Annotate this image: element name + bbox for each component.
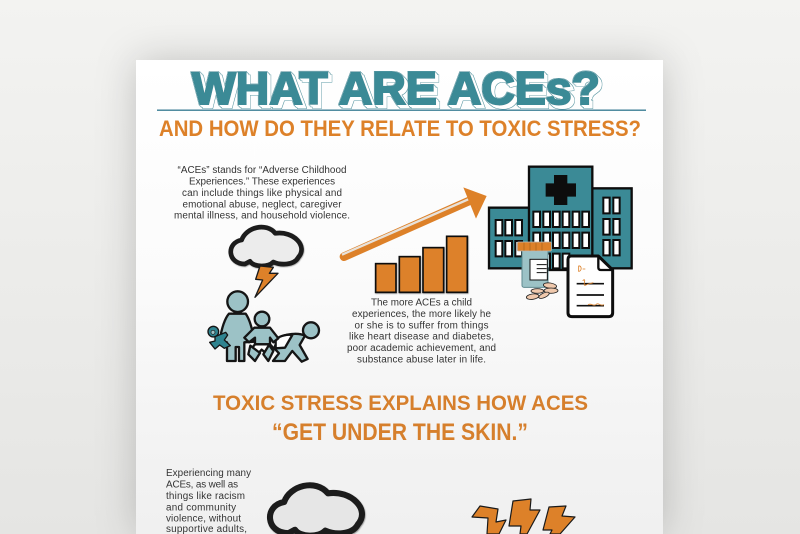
text block: effects of ACEs: The more ACEs a child xyxy=(371,298,472,308)
icon: crawling baby xyxy=(273,322,319,362)
text block: effects of ACEs: substance abuse later in life. xyxy=(357,354,486,365)
icon: cloud xyxy=(231,227,302,266)
text block: what ACEs stands for xyxy=(174,165,350,222)
heading: toxic stress: “GET UNDER THE SKIN.” xyxy=(272,419,528,446)
bar chart xyxy=(376,236,467,292)
icon: hospital windows xyxy=(496,198,620,268)
title rule xyxy=(157,110,646,111)
icon: teddy bear xyxy=(208,326,230,349)
icon: older child xyxy=(220,291,254,361)
icon: toddler in diaper xyxy=(244,312,278,361)
text block: experiencing many ACEs: Experiencing many xyxy=(166,468,251,479)
icon: pills xyxy=(526,282,558,300)
text block: effects of ACEs xyxy=(347,298,496,365)
icon: left bolt xyxy=(472,506,506,534)
icon: prescription paper xyxy=(568,256,613,317)
text block: what ACEs stands for: mental illness, and household violence. xyxy=(174,211,350,222)
icon: lightning bolt xyxy=(255,266,278,297)
text block: effects of ACEs: or she is to suffer from things xyxy=(354,320,489,331)
heading: toxic stress: TOXIC STRESS EXPLAINS HOW ACES xyxy=(213,392,588,415)
text block: experiencing many ACEs: things like racism xyxy=(166,491,245,502)
text block: what ACEs stands for: can include things like physical and xyxy=(182,188,342,199)
icon: large cloud xyxy=(270,485,362,534)
text block: what ACEs stands for: Experiences.” These experiences xyxy=(189,176,335,188)
icon: medicine bottle xyxy=(517,242,551,287)
paper sheet xyxy=(136,60,663,534)
text block: experiencing many ACEs xyxy=(166,468,251,534)
text block: effects of ACEs: experiences, the more likely he xyxy=(352,309,492,320)
text block: what ACEs stands for: “ACEs” stands for “Adverse Childhood xyxy=(178,165,346,176)
icon: medical cross xyxy=(546,175,576,205)
icon: right bolt xyxy=(543,506,575,534)
icon: three lightning bolts xyxy=(472,499,575,534)
text block: experiencing many ACEs: ACEs, as well as xyxy=(166,480,238,490)
heading: toxic stress xyxy=(213,392,588,446)
icon: middle bolt xyxy=(509,499,540,534)
icon: rising arrow xyxy=(342,187,487,257)
icon: children group xyxy=(208,291,319,362)
text block: effects of ACEs: poor academic achievement, and xyxy=(347,343,496,354)
icon: storm cloud with lightning xyxy=(231,227,302,297)
text block: effects of ACEs: like heart disease and diabetes, xyxy=(349,332,494,343)
text block: what ACEs stands for: emotional abuse, neglect, caregiver xyxy=(182,199,342,210)
text block: experiencing many ACEs: and community xyxy=(166,502,236,513)
subtitle: AND HOW DO THEY RELATE TO TOXIC STRESS? xyxy=(159,116,641,141)
icon: hospital, medicine and prescription xyxy=(489,167,632,317)
title: WHAT ARE ACEs? xyxy=(192,63,600,114)
text block: experiencing many ACEs: violence, without xyxy=(166,514,241,525)
icon: hospital building xyxy=(489,167,632,270)
